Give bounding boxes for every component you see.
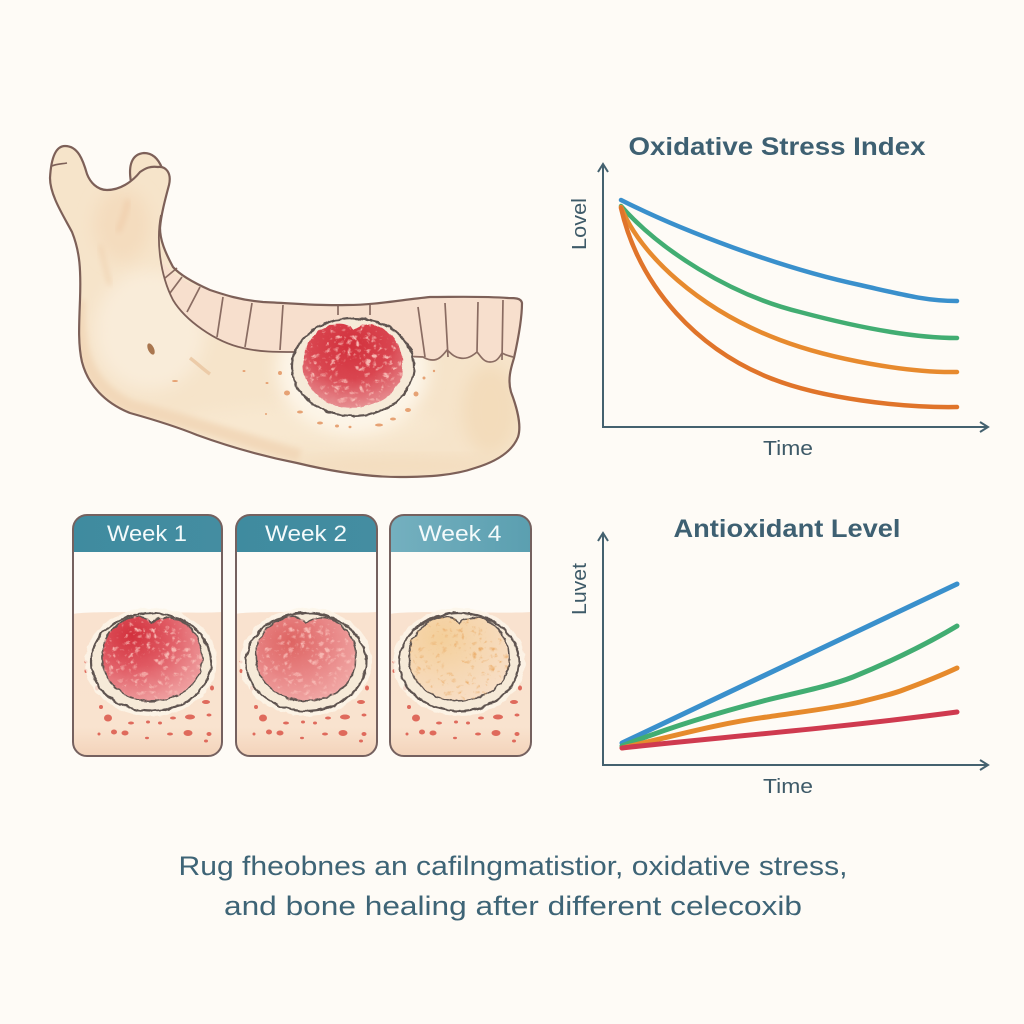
axes [598,533,988,770]
line: green [622,626,957,746]
chart: oxidative stress index [569,133,988,460]
x axis label: Time [763,776,813,798]
panel: week 2 [236,515,377,756]
week 1 header [73,515,222,552]
week 1 tissue [73,612,222,756]
caption: and bone healing after different celecoxib [224,891,802,921]
defect core [303,324,403,408]
week 4 tissue [390,612,531,756]
x axis label: Time [763,438,813,460]
week 1 label: Week 1 [107,521,187,546]
panel: week 1 [73,515,222,756]
curve: blue [621,200,957,301]
teeth separators [165,268,513,362]
line: red [622,712,957,748]
caption [178,851,848,921]
bone speckles [172,370,435,428]
axes [598,164,988,432]
curve: green [621,206,957,338]
line: orange [622,668,957,748]
y axis label: Lovel [569,198,591,250]
defect rim [292,318,414,416]
mental foramen [146,342,156,356]
week 4 header [390,515,531,552]
chart: antioxidant level [569,515,988,798]
coronoid process behind [130,153,162,190]
week 1 border [73,515,222,756]
chart title: Antioxidant Level [674,515,900,543]
panel: week 4 [390,515,531,756]
jaw base [50,146,522,477]
outline [50,146,522,477]
caption: Rug fheobnes an cafilngmatistior, oxidative stress, [178,851,848,881]
week 4 speckles [392,660,522,742]
week 2 label: Week 2 [265,521,347,546]
week 1 speckles [84,660,214,742]
jaw shading [79,189,518,475]
line: blue [622,584,957,743]
week 2 defect [240,608,372,716]
week 2 border [236,515,377,756]
week 2 speckles [240,660,369,742]
week 4 border [390,515,531,756]
chart title: Oxidative Stress Index [628,133,926,161]
week 2 tissue [236,612,377,756]
week 4 label: Week 4 [418,521,502,546]
week 1 defect [85,608,217,716]
week 2 header [236,515,377,552]
illustration: jaw bone with defect [50,146,522,477]
curve: orange [621,207,957,372]
week 4 defect [393,608,525,716]
teeth band [163,262,522,362]
curve: dark orange [621,208,957,407]
bone margin [159,215,296,352]
y axis label: Luvet [569,563,591,615]
